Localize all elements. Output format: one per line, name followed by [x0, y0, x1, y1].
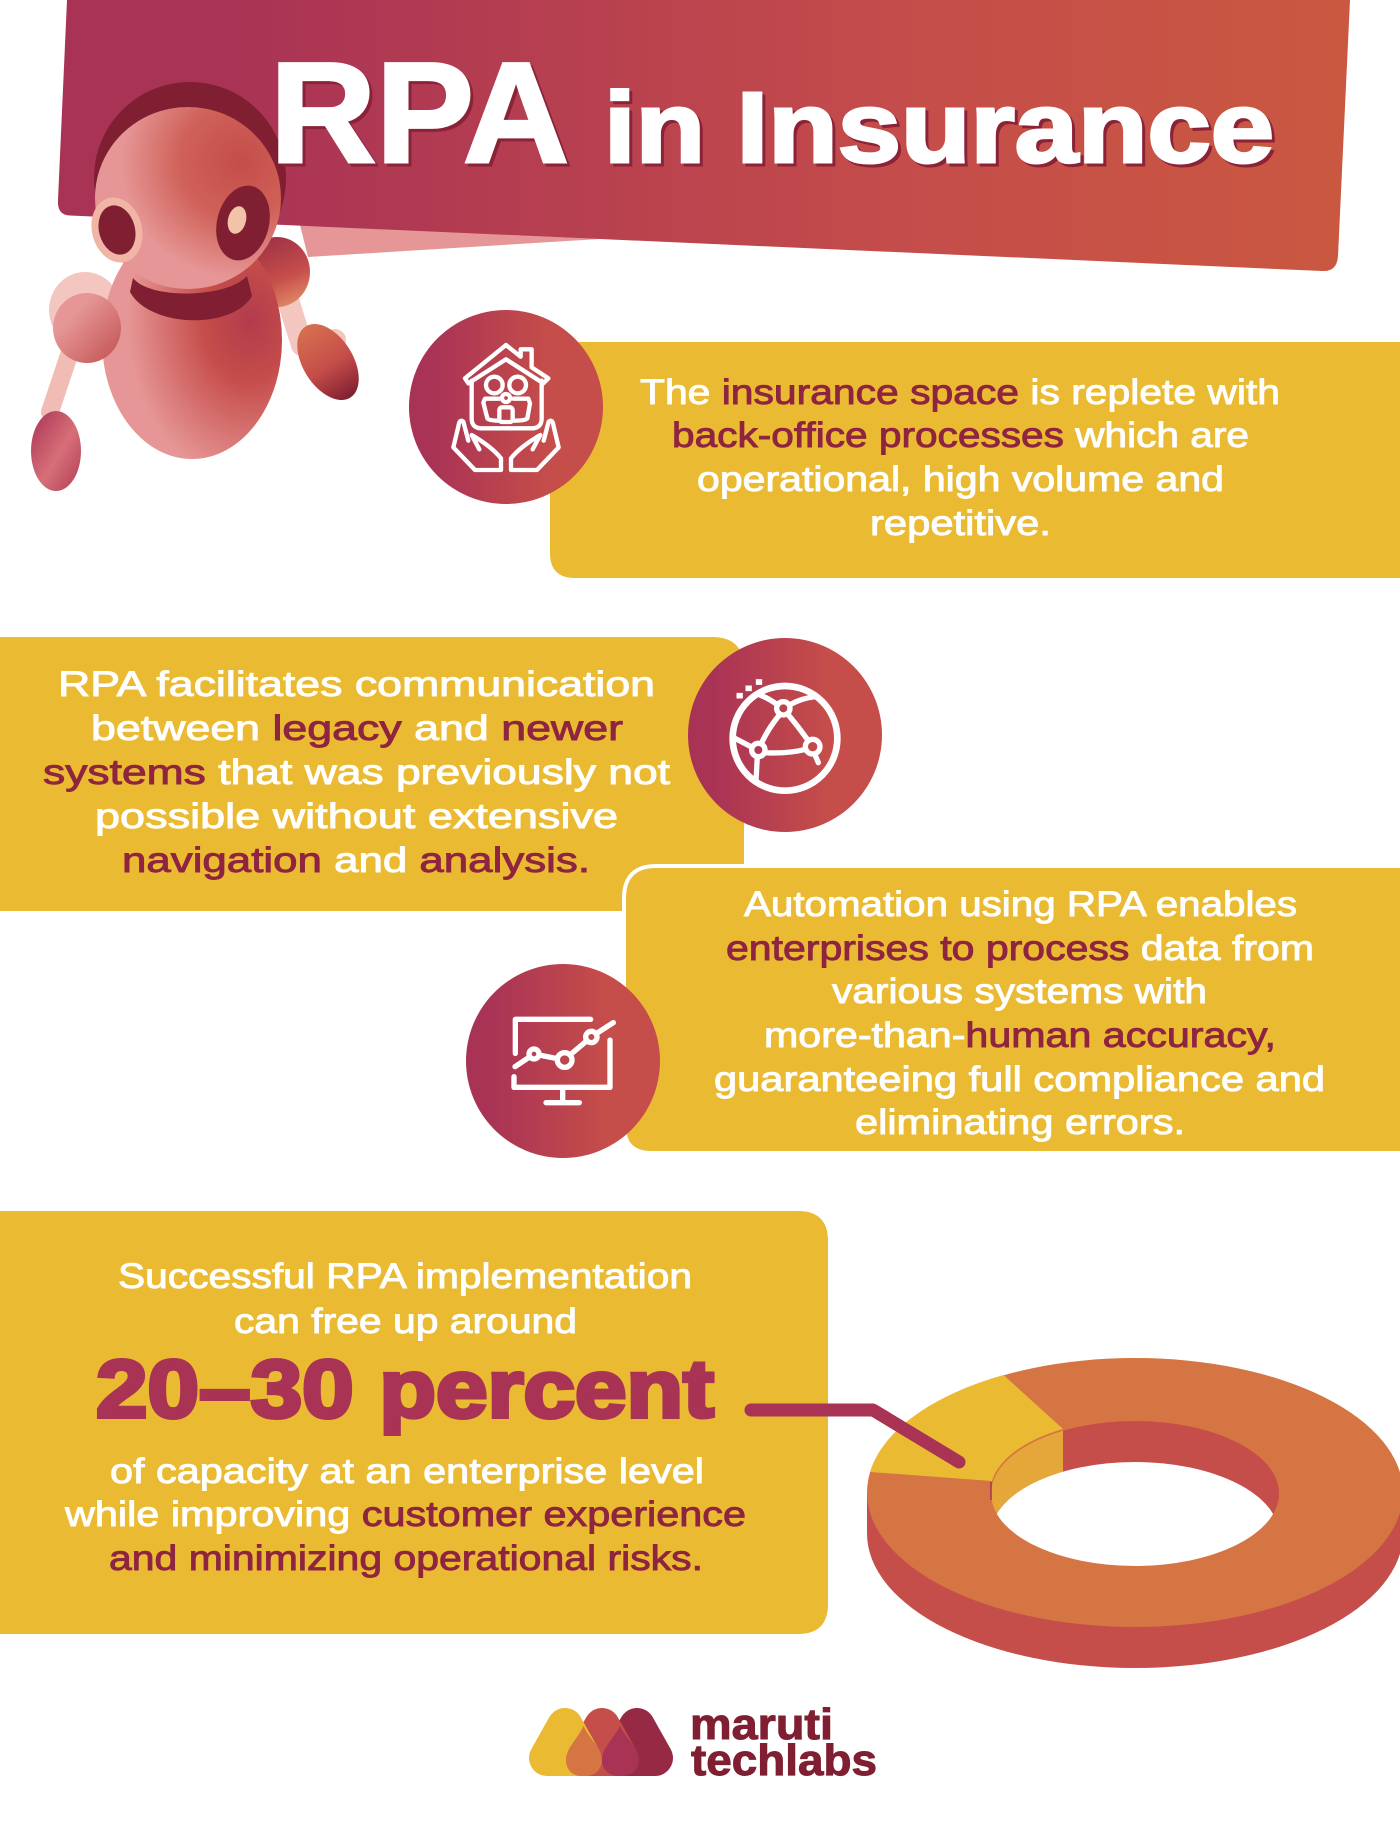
logo wordmark: maruti [690, 1700, 833, 1749]
robot left arm [50, 352, 70, 412]
robot left eye [84, 192, 150, 268]
panel text: enterprises to process data from [726, 929, 1314, 968]
logo wordmark [690, 1700, 877, 1785]
panel background [550, 342, 1400, 578]
panel text [43, 665, 670, 880]
panel text: systems that was previously not [43, 753, 670, 792]
robot left shoulder [53, 293, 121, 363]
robot right arm [288, 300, 335, 345]
panel intro text: Successful RPA implementation [118, 1257, 692, 1296]
robot body [102, 221, 282, 459]
logo: maruti techlabs [547, 1700, 877, 1785]
panel: process data [466, 868, 1400, 1158]
panel closing text [64, 1452, 746, 1578]
panel text: back-office processes which are [672, 416, 1249, 455]
panel text: repetitive. [870, 504, 1051, 543]
arrow: pointer from statistic to slice [751, 1410, 959, 1462]
title [270, 34, 1274, 193]
banner shadow wedge [300, 225, 600, 257]
panel background [626, 868, 1400, 1151]
logo mark [547, 1726, 655, 1776]
panel background [0, 1211, 828, 1634]
chart: 3D donut with highlighted slice [867, 1358, 1400, 1668]
panel text: guaranteeing full compliance and [714, 1060, 1325, 1099]
panel background [0, 637, 744, 911]
highlighted slice [870, 1375, 1063, 1481]
robot left shoulder halo [49, 272, 121, 348]
panel text: navigation and analysis. [122, 841, 590, 880]
panel: legacy and newer systems [0, 637, 882, 911]
robot smile [130, 276, 252, 320]
robot head shadow [94, 82, 286, 274]
panel text [714, 885, 1325, 1142]
donut hole [997, 1462, 1273, 1566]
robot head [95, 107, 281, 289]
title: in Insurance [604, 72, 1274, 184]
robot left hand [31, 411, 81, 491]
panel text: The insurance space is replete with [640, 373, 1280, 412]
icon: monitor with line chart [466, 964, 660, 1158]
donut side wall [867, 1492, 1400, 1668]
icon: network globe [688, 638, 882, 832]
title: RPA [270, 34, 569, 193]
panel text: various systems with [832, 972, 1207, 1011]
big statistic: 20–30 percent [96, 1344, 714, 1435]
panel text: between legacy and newer [91, 709, 623, 748]
donut top face [867, 1358, 1400, 1627]
panel text: RPA facilitates communication [58, 665, 655, 704]
panel text: more-than- human accuracy, [764, 1016, 1276, 1055]
banner shape [58, 0, 1350, 271]
panel: capacity statistic [0, 1211, 828, 1634]
robot right eye [209, 180, 277, 266]
panel text: possible without extensive [95, 797, 618, 836]
panel text [640, 373, 1280, 543]
robot right hand [285, 313, 371, 411]
panel closing text: while improving customer experience [64, 1495, 746, 1534]
illustration: robot [31, 82, 371, 491]
panel intro text: can free up around [234, 1302, 577, 1341]
donut inner wall [991, 1421, 1279, 1566]
panel closing text: of capacity at an enterprise level [110, 1452, 704, 1491]
icon: house in hands [409, 310, 603, 504]
inner wall of highlighted slice [992, 1430, 1063, 1535]
panel text: operational, high volume and [697, 460, 1224, 499]
slice edge mark [990, 1482, 992, 1500]
panel text: eliminating errors. [855, 1103, 1185, 1142]
panel: title banner [58, 0, 1350, 271]
logo wordmark: techlabs [691, 1736, 877, 1785]
panel: insurance space [409, 310, 1400, 578]
robot right shoulder [244, 237, 310, 307]
panel intro text [118, 1257, 692, 1341]
panel closing text: and minimizing operational risks. [109, 1539, 703, 1578]
panel text: Automation using RPA enables [744, 885, 1297, 924]
